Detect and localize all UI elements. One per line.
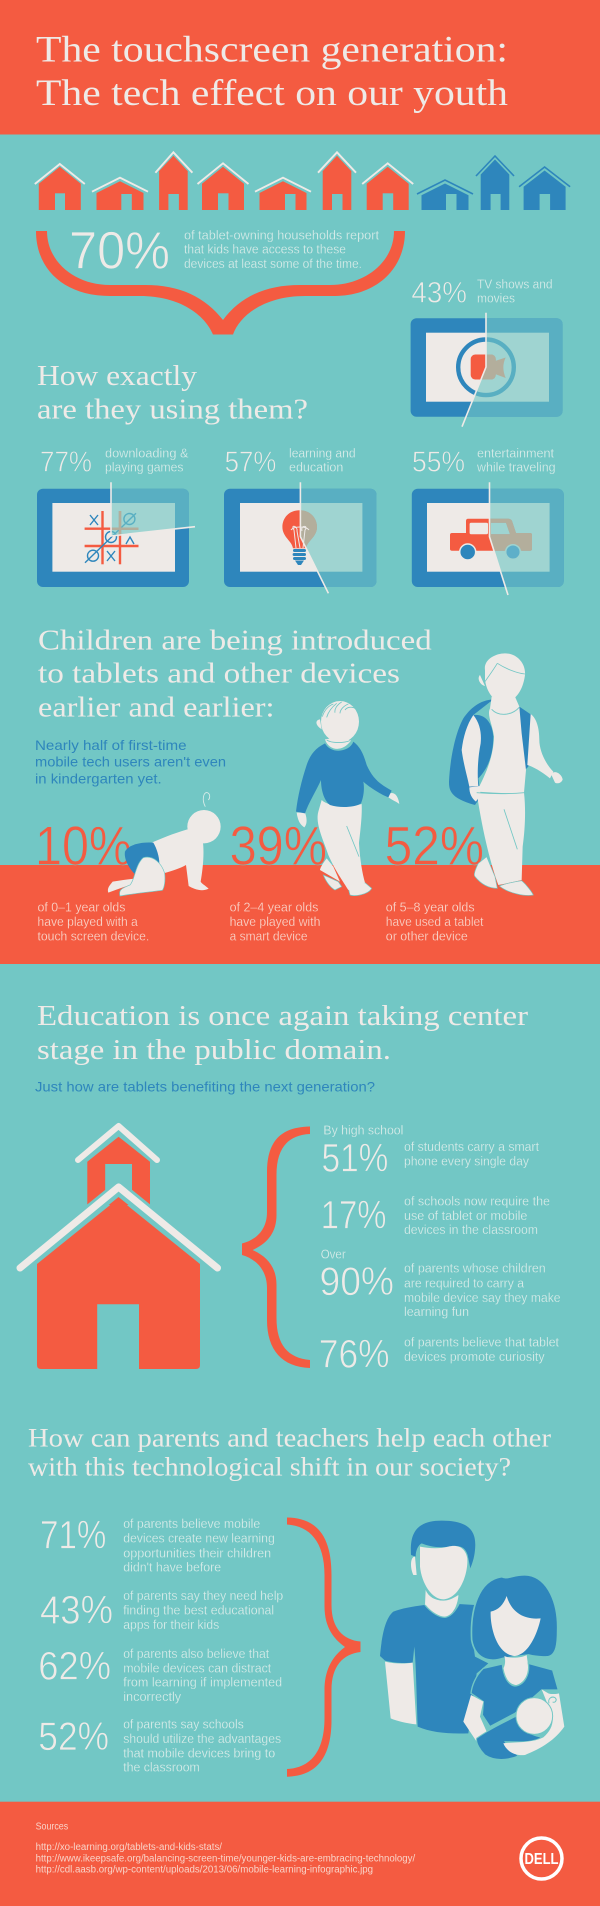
heading: education: Education is once again taking center <box>37 1000 528 1032</box>
age captions: or other device <box>386 928 468 943</box>
stat: 51 percent: of students carry a smart <box>404 1139 539 1154</box>
stat: 43 percent of parents <box>40 1588 283 1632</box>
age captions: of 5–8 year olds <box>386 900 475 915</box>
heading: children <box>38 624 432 724</box>
heading: education: stage in the public domain. <box>37 1034 391 1066</box>
stat: 51 percent: phone every single day <box>404 1154 529 1169</box>
age percentages: 52% <box>385 815 484 877</box>
heading: parents and teachers <box>28 1424 551 1482</box>
heading: how exactly: are they using them? <box>37 394 308 425</box>
stat: 71 percent of parents: of parents believe mobile <box>123 1516 260 1531</box>
stat: 43 percent TV shows <box>411 276 552 310</box>
blue subheading: Just how are tablets benefiting the next generation? <box>35 1079 375 1095</box>
right curly brace <box>287 1518 360 1777</box>
stat: 77 percent games: playing games <box>105 460 184 475</box>
stat: 90 percent: mobile device say they make <box>404 1290 561 1305</box>
age captions: of 2–4 year olds <box>230 900 319 915</box>
heading: education <box>37 1000 528 1066</box>
heading: parents and teachers: How can parents and teachers help each other <box>28 1424 551 1453</box>
stat: 51 percent: By high school <box>323 1122 403 1137</box>
sources: http://xo-learning.org/tablets-and-kids-stats/ <box>36 1842 222 1853</box>
tablet: video icon <box>411 310 570 430</box>
age captions: have used a tablet <box>386 914 484 929</box>
age percentages: 39% <box>230 815 327 877</box>
stat: 90 percent: of parents whose children <box>404 1261 546 1276</box>
stat: 77 percent games: 77% <box>40 447 92 479</box>
heading: how exactly <box>37 361 308 425</box>
stat: 43 percent TV shows: TV shows and <box>477 276 552 291</box>
stat: 76 percent: of parents believe that tablet <box>404 1335 559 1350</box>
stat: 70 percent of households: of tablet-owning households report <box>184 227 379 242</box>
stat: 71 percent of parents: devices create new learning <box>123 1531 275 1546</box>
curly bracket under houses <box>36 231 405 334</box>
stat: 77 percent games: downloading & <box>105 445 189 460</box>
stat: 17 percent: devices in the classroom <box>404 1222 538 1237</box>
stat: 17 percent: use of tablet or mobile <box>404 1208 527 1223</box>
stat: 55 percent travel <box>412 445 556 479</box>
stat: 62 percent of parents: mobile devices can distract <box>123 1660 272 1675</box>
stat: 71 percent of parents <box>40 1513 275 1574</box>
blue intro text: mobile tech users aren't even <box>35 754 226 770</box>
stat: 76 percent <box>319 1333 559 1377</box>
stat: 70 percent of households <box>69 221 379 280</box>
age captions: have played with <box>230 914 320 929</box>
stat: 62 percent of parents: 62% <box>38 1644 111 1688</box>
stat: 51 percent: 51% <box>322 1137 388 1181</box>
heading: children: earlier and earlier: <box>38 692 274 724</box>
stat: 17 percent: of schools now require the <box>404 1193 550 1208</box>
sources: Sources <box>36 1821 68 1832</box>
stat: 52 percent of parents: of parents say schools <box>123 1717 244 1732</box>
stat: 71 percent of parents: didn't have before <box>123 1559 221 1574</box>
stat: 55 percent travel: 55% <box>412 447 465 479</box>
age captions: have played with a <box>38 914 139 929</box>
footer band <box>0 1802 600 1906</box>
age captions: of 0–1 year olds <box>38 900 126 915</box>
age percentages <box>35 815 484 877</box>
stat: 17 percent: 17% <box>321 1193 386 1237</box>
title: The tech effect on our youth <box>36 73 509 114</box>
sources <box>36 1821 415 1876</box>
title <box>36 30 509 114</box>
illustration: schoolhouse <box>18 1126 219 1369</box>
stat: 70 percent of households: devices at least some of the time. <box>184 256 362 271</box>
Dell logo: DELL <box>524 1851 558 1868</box>
tablet: light bulb icon <box>224 480 380 600</box>
stat: 90 percent: learning fun <box>404 1304 469 1319</box>
stat: 70 percent of households: that kids have access to these <box>184 242 346 257</box>
header band <box>0 0 600 134</box>
stat: 90 percent: Over <box>321 1246 346 1261</box>
illustration: teen with backpack <box>449 653 563 895</box>
heading: children: Children are being introduced <box>38 624 432 656</box>
blue intro text: in kindergarten yet. <box>35 770 162 786</box>
stat: 52 percent of parents: that mobile devices bring to <box>123 1745 275 1760</box>
tablet: car icon <box>412 480 570 600</box>
stat: 90 percent <box>320 1246 561 1319</box>
mother <box>463 1575 558 1742</box>
stat: 52 percent of parents <box>38 1715 282 1775</box>
stat: 71 percent of parents: 71% <box>40 1513 106 1557</box>
stat: 43 percent TV shows: 43% <box>411 277 467 310</box>
stat: 52 percent of parents: the classroom <box>123 1760 200 1775</box>
stat: 43 percent of parents: apps for their kids <box>123 1617 220 1632</box>
stat: 71 percent of parents: opportunities their children <box>123 1545 271 1560</box>
row of ten houses <box>35 152 570 210</box>
stat: 90 percent: are required to carry a <box>404 1275 525 1290</box>
orange band <box>0 865 600 964</box>
stat: 62 percent of parents <box>38 1644 282 1704</box>
stat: 57 percent learning: learning and <box>289 445 356 460</box>
age percentages: 10% <box>35 815 132 877</box>
stat: 62 percent of parents: incorrectly <box>123 1689 182 1704</box>
stat: 43 percent TV shows: movies <box>477 291 515 306</box>
father <box>380 1521 488 1733</box>
illustration: walking child <box>296 701 399 896</box>
Dell logo <box>521 1838 562 1879</box>
age captions <box>38 900 484 943</box>
stat: 57 percent learning <box>225 445 356 479</box>
stat: 17 percent <box>321 1193 550 1237</box>
age captions: touch screen device. <box>38 928 149 943</box>
stat: 55 percent travel: entertainment <box>477 445 554 460</box>
heading: how exactly: How exactly <box>37 361 197 392</box>
stat: 55 percent travel: while traveling <box>476 460 556 475</box>
illustration: parents with baby <box>380 1521 564 1759</box>
stat: 76 percent: devices promote curiosity <box>404 1349 545 1364</box>
stat: 57 percent learning: education <box>289 460 343 475</box>
stat: 70 percent of households: 70% <box>69 221 170 280</box>
stat: 52 percent of parents: should utilize the advantages <box>123 1731 282 1746</box>
stat: 62 percent of parents: from learning if implemented <box>123 1675 282 1690</box>
illustration: crawling baby <box>108 793 221 896</box>
stat: 77 percent games <box>40 445 189 479</box>
stat: 43 percent of parents: 43% <box>40 1588 113 1632</box>
blue intro text: Nearly half of first-time <box>35 737 187 753</box>
heading: parents and teachers: with this technological shift in our society? <box>28 1453 511 1482</box>
heading: children: to tablets and other devices <box>38 658 400 690</box>
stat: 51 percent <box>322 1122 539 1181</box>
sources: http://www.ikeepsafe.org/balancing-screen-time/younger-kids-are-embracing-technology/ <box>36 1853 415 1864</box>
age captions: a smart device <box>230 928 308 943</box>
title: The touchscreen generation: <box>36 30 508 71</box>
stat: 62 percent of parents: of parents also believe that <box>123 1646 270 1661</box>
left curly brace <box>242 1126 310 1368</box>
sources: http://cdl.aasb.org/wp-content/uploads/2013/06/mobile-learning-infographic.jpg <box>36 1865 373 1876</box>
stat: 90 percent: 90% <box>320 1260 394 1304</box>
tablet: tic tac toe icon <box>37 480 195 587</box>
stat: 52 percent of parents: 52% <box>38 1715 109 1759</box>
baby in arms <box>477 1689 564 1759</box>
stat: 43 percent of parents: of parents say they need help <box>123 1588 283 1603</box>
blue intro text <box>35 737 226 786</box>
stat: 76 percent: 76% <box>319 1333 390 1377</box>
stat: 43 percent of parents: finding the best educational <box>123 1602 274 1617</box>
stat: 57 percent learning: 57% <box>225 447 276 479</box>
